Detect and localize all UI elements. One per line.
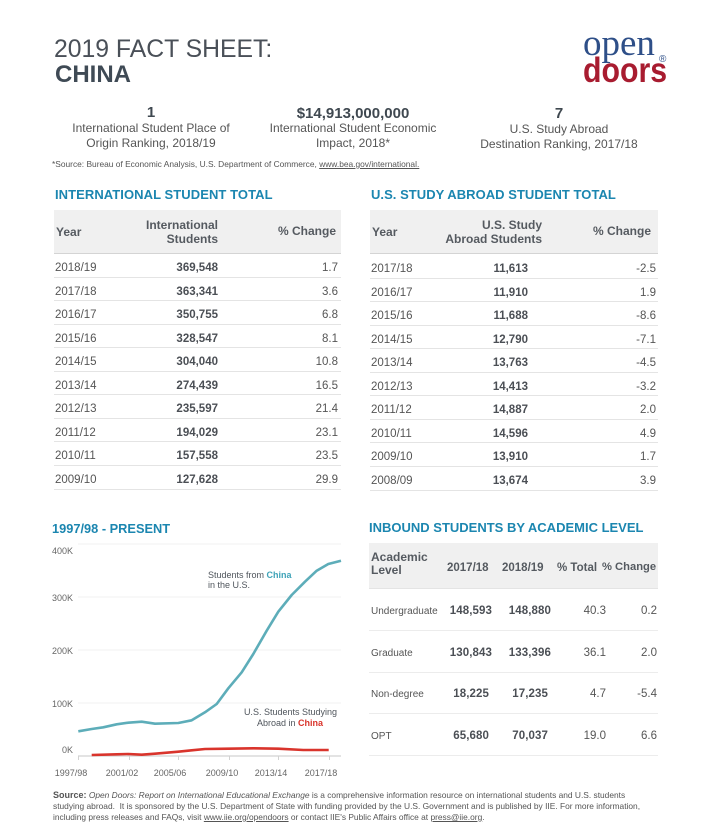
x axis [78, 756, 341, 760]
stat: economic impact: International Student Economic [270, 121, 436, 135]
row 2016/17 [54, 301, 341, 324]
row 2010/11: 2010/11 [371, 428, 412, 440]
row undergraduate [369, 589, 658, 631]
country name: CHINA [55, 61, 131, 88]
heading: international student total: INTERNATIONAL STUDENT TOTAL [55, 187, 273, 202]
table header: Academic [371, 550, 428, 564]
row 2018/19: 1.7 [322, 262, 338, 274]
row 2013/14 [54, 372, 341, 395]
row 2013/14: 13,763 [493, 357, 528, 369]
row 2016/17: 350,755 [176, 309, 218, 321]
table header: International [146, 218, 218, 232]
row 2015/16 [370, 302, 658, 326]
row OPT: 70,037 [512, 730, 548, 742]
row 2010/11: 4.9 [640, 428, 656, 440]
row 2010/11 [54, 442, 341, 466]
row 2014/15: 2014/15 [55, 356, 97, 368]
row 2016/17: 11,910 [493, 286, 528, 298]
row 2014/15 [54, 348, 341, 372]
row 2009/10: 2009/10 [371, 451, 413, 463]
row non-degree: Non-degree [371, 689, 424, 700]
row 2017/18 [54, 278, 341, 301]
row 2015/16: 8.1 [322, 332, 338, 344]
row 2009/10: 13,910 [493, 451, 528, 463]
row 2012/13: -3.2 [636, 380, 656, 392]
table header: Students [167, 232, 218, 246]
table header [369, 543, 658, 589]
y axis labels [52, 546, 73, 755]
row 2011/12: 23.1 [316, 426, 338, 438]
row 2016/17 [370, 278, 658, 302]
logo: open doors [583, 22, 667, 90]
line: students from China [78, 561, 341, 731]
row 2017/18: 363,341 [176, 286, 218, 298]
y axis labels: 100K [52, 699, 73, 709]
row 2015/16 [54, 324, 341, 348]
table header: 2017/18 [447, 562, 489, 574]
x axis labels: 2001/02 [106, 768, 138, 778]
row graduate: 133,396 [509, 647, 551, 659]
row 2010/11 [370, 420, 658, 443]
row 2009/10 [370, 443, 658, 466]
x axis labels: 2009/10 [206, 768, 238, 778]
footer source text: including press releases and FAQs, visit www.iie.org/opendoors or contact IIE's Public Affairs office at press@iie.org. [53, 812, 485, 822]
row 2014/15: 10.8 [316, 356, 338, 368]
table header [370, 210, 658, 254]
row 2013/14: -4.5 [636, 357, 656, 369]
x axis labels: 1997/98 [55, 768, 87, 778]
row 2011/12: 2011/12 [55, 426, 96, 438]
row 2014/15 [370, 326, 658, 349]
row 2015/16: 11,688 [493, 310, 528, 322]
row 2010/11: 157,558 [176, 450, 218, 462]
row 2018/19: 2018/19 [55, 262, 97, 274]
row 2010/11: 2010/11 [55, 450, 96, 462]
row 2008/09: 2008/09 [371, 475, 413, 487]
row 2017/18: -2.5 [636, 263, 656, 275]
table header: % Change [602, 561, 656, 573]
row 2016/17: 2016/17 [371, 286, 413, 298]
row 2013/14: 274,439 [176, 380, 218, 392]
label: students from China: in the U.S. [208, 580, 250, 590]
row graduate: 36.1 [584, 647, 606, 659]
y axis labels: 300K [52, 593, 73, 603]
stat: place of origin: 1 [147, 104, 155, 121]
row 2014/15: -7.1 [636, 334, 656, 346]
heading: 1997/98 to present: 1997/98 - PRESENT [52, 521, 170, 536]
label: U.S. students abroad: U.S. Students Studying [244, 707, 337, 717]
table: us study abroad student total [370, 210, 658, 491]
row non-degree: 4.7 [590, 688, 606, 700]
row 2016/17: 6.8 [322, 309, 338, 321]
y axis labels: 0K [62, 745, 73, 755]
row 2009/10: 29.9 [316, 474, 338, 486]
stat: economic impact [270, 105, 436, 150]
row 2012/13: 21.4 [316, 403, 338, 415]
row 2015/16: -8.6 [636, 310, 656, 322]
row non-degree [369, 672, 658, 714]
label: U.S. students abroad: Abroad in China [257, 718, 323, 728]
row 2013/14: 16.5 [316, 380, 338, 392]
table header: 2018/19 [502, 562, 544, 574]
row 2017/18: 11,613 [493, 263, 528, 275]
row OPT: OPT [371, 731, 392, 742]
footer source text [53, 790, 640, 822]
row 2017/18 [370, 255, 658, 278]
row 2012/13: 14,413 [493, 380, 528, 392]
x axis labels: 2013/14 [255, 768, 287, 778]
table header [54, 210, 341, 254]
stat: place of origin: Origin Ranking, 2018/19 [86, 136, 216, 150]
row non-degree: -5.4 [637, 688, 657, 700]
stat: economic impact: Impact, 2018* [316, 136, 390, 150]
row 2014/15: 12,790 [493, 334, 528, 346]
footer source text: Source: Open Doors: Report on International Educational Exchange is a comprehensive information resource on international students and U.S. students [53, 790, 625, 800]
row 2015/16: 328,547 [176, 332, 218, 344]
stat: place of origin: International Student Place of [72, 121, 230, 135]
row 2017/18: 2017/18 [371, 263, 413, 275]
table header: Year [56, 225, 81, 239]
table header: Abroad Students [445, 232, 542, 246]
row 2012/13 [370, 372, 658, 396]
row 2011/12: 2.0 [640, 404, 656, 416]
row 2009/10: 1.7 [640, 451, 656, 463]
stat: study abroad destination: 7 [555, 105, 563, 122]
row non-degree: 17,235 [512, 688, 548, 700]
title [54, 36, 272, 88]
logo word: open: open [583, 22, 655, 64]
table header: % Change [593, 224, 651, 238]
row 2018/19 [54, 254, 341, 278]
row 2009/10: 2009/10 [55, 474, 97, 486]
row 2013/14: 2013/14 [371, 357, 413, 369]
row 2012/13: 235,597 [176, 403, 218, 415]
row 2012/13: 2012/13 [55, 403, 97, 415]
row 2008/09 [370, 467, 658, 490]
row 2017/18: 2017/18 [55, 286, 97, 298]
source note: *Source: Bureau of Economic Analysis, U.S. Department of Commerce, www.bea.gov/international. [52, 159, 419, 169]
row 2014/15: 304,040 [176, 356, 218, 368]
x axis labels: 2005/06 [154, 768, 186, 778]
row 2012/13 [54, 395, 341, 418]
row 2011/12: 194,029 [176, 426, 218, 438]
row undergraduate: 0.2 [641, 605, 657, 617]
label: students from China: Students from China [208, 570, 292, 580]
row 2010/11: 14,596 [493, 428, 528, 440]
row 2011/12: 2011/12 [371, 404, 412, 416]
footer source text: studying abroad. It is sponsored by the U.S. Department of State with funding provided by the U.S. Government and is published by IIE. For more information, [53, 801, 640, 811]
table header: % Total [557, 562, 597, 574]
row non-degree: 18,225 [453, 688, 489, 700]
row OPT: 65,680 [453, 730, 489, 742]
table header: Year [372, 225, 397, 239]
row OPT [369, 714, 658, 756]
row OPT: 19.0 [584, 730, 606, 742]
row 2008/09: 13,674 [493, 475, 528, 487]
y axis labels: 400K [52, 546, 73, 556]
row 2013/14: 2013/14 [55, 380, 97, 392]
table: inbound students by level [369, 543, 658, 756]
row 2017/18: 3.6 [322, 286, 338, 298]
row OPT: 6.6 [641, 730, 657, 742]
row 2014/15: 2014/15 [371, 334, 413, 346]
x axis labels: 2017/18 [305, 768, 337, 778]
row 2008/09: 3.9 [640, 475, 656, 487]
heading: inbound students by academic level: INBOUND STUDENTS BY ACADEMIC LEVEL [369, 520, 643, 535]
table header: U.S. Study [482, 218, 542, 232]
row 2012/13: 2012/13 [371, 380, 413, 392]
row 2011/12: 14,887 [493, 404, 528, 416]
row 2016/17: 1.9 [640, 286, 656, 298]
heading: us study abroad student total: U.S. STUDY ABROAD STUDENT TOTAL [371, 187, 616, 202]
row graduate: Graduate [371, 648, 413, 659]
row undergraduate: 148,593 [450, 605, 492, 617]
line chart [52, 544, 342, 778]
row 2018/19: 369,548 [176, 262, 218, 274]
stat: economic impact: $14,913,000,000 [297, 105, 409, 122]
row graduate [369, 631, 658, 673]
row 2010/11: 23.5 [316, 450, 338, 462]
row 2011/12 [54, 418, 341, 442]
stat: study abroad destination: Destination Ranking, 2017/18 [480, 137, 638, 151]
row 2013/14 [370, 349, 658, 372]
row undergraduate: 148,880 [509, 605, 551, 617]
table header: % Change [278, 224, 336, 238]
title line: 2019 FACT SHEET: [54, 36, 272, 63]
stat: study abroad destination: U.S. Study Abroad [510, 122, 608, 136]
row graduate: 130,843 [450, 647, 492, 659]
y axis labels: 200K [52, 646, 73, 656]
line: U.S. students in China [92, 748, 329, 755]
row 2015/16: 2015/16 [55, 332, 97, 344]
x axis labels [55, 768, 337, 778]
table: international student total [54, 210, 341, 490]
stat: study abroad destination [480, 105, 638, 151]
row undergraduate: Undergraduate [371, 606, 438, 617]
logo word: doors: doors [583, 51, 667, 90]
row 2011/12 [370, 396, 658, 420]
row 2016/17: 2016/17 [55, 309, 97, 321]
table header: Level [371, 563, 402, 577]
logo mark: registered: ® [659, 54, 666, 65]
row undergraduate: 40.3 [584, 605, 606, 617]
row graduate: 2.0 [641, 647, 657, 659]
row 2015/16: 2015/16 [371, 310, 413, 322]
stat: place of origin [72, 104, 230, 150]
row 2009/10 [54, 466, 341, 490]
row 2009/10: 127,628 [176, 474, 218, 486]
